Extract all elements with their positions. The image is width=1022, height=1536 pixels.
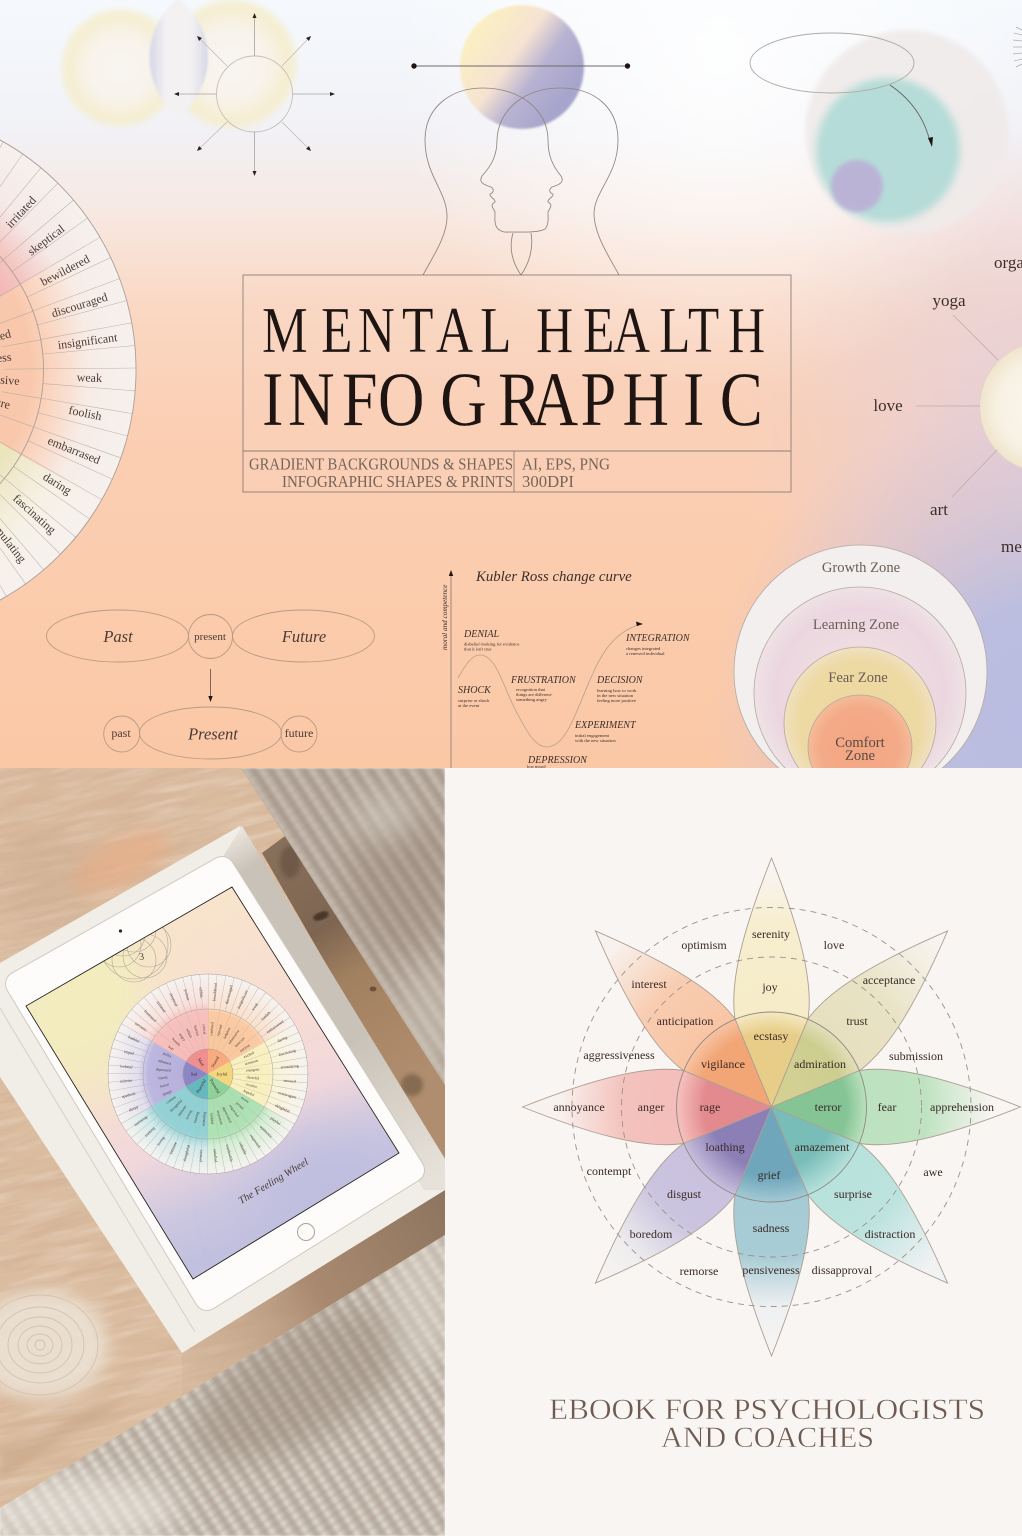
wheel outer ring labels: loving: [156, 1135, 166, 1147]
petal: fear: [772, 1069, 1020, 1145]
wheel outer ring labels: frustrated: [143, 1008, 158, 1023]
title box: [243, 275, 791, 492]
chart: Kubler Ross change curve: FRUSTRATION: [510, 675, 577, 686]
wheel middle ring labels: hateful: [193, 1025, 200, 1036]
wheel center labels: [191, 1055, 228, 1095]
title: line one: MENTAL HEALTH: [262, 293, 765, 366]
wheel middle ring labels: hostile: [171, 1037, 181, 1047]
emotion labels: grief: [758, 1168, 780, 1182]
chart: flower of emotions: [522, 858, 1020, 1356]
chart: past present future ellipses: future: [285, 726, 313, 740]
wheel center labels: Powerful: [209, 1078, 222, 1095]
wheel outer ring labels: playful: [269, 1115, 282, 1126]
chart: Kubler Ross change curve: at the event: [458, 703, 480, 708]
wheel outer ring labels: valuable: [238, 1141, 248, 1155]
emotion labels: submission: [889, 1049, 943, 1063]
wheel center labels: Joyful: [217, 1072, 228, 1076]
emotion labels: rage: [700, 1100, 720, 1114]
wheel outer ring labels: delightful: [274, 1103, 291, 1114]
chart: Kubler Ross change curve: [441, 569, 691, 769]
wheel middle ring labels: intimate: [177, 1104, 188, 1117]
chart: past present future ellipses: [46, 610, 374, 759]
emotion labels: [553, 927, 994, 1278]
wheel outer ring labels: worthwhile: [225, 1144, 235, 1163]
emotion labels: surprise: [834, 1187, 872, 1201]
chart: Kubler Ross change curve: SHOCK: [458, 685, 492, 696]
emotion labels: disgust: [667, 1187, 702, 1201]
emotion labels: acceptance: [863, 973, 915, 987]
wheel outer ring labels: amused: [283, 1078, 296, 1084]
icon: camera dot: [119, 929, 122, 933]
panel: right ebook background: [445, 768, 1022, 1536]
chart: partial feeling wheel left: weak: [76, 370, 102, 385]
wheel middle ring labels: submissive: [227, 1029, 240, 1045]
icon: gradient sphere behind heads: [460, 5, 584, 129]
panel: tablet on wooden table photo: [0, 768, 445, 1536]
emotion labels: dissapproval: [812, 1263, 873, 1277]
wheel middle ring labels: [156, 1022, 260, 1126]
wheel middle ring labels: nurturing: [201, 1112, 207, 1126]
chart: moon with radiating words: yoga: [932, 291, 966, 310]
emotion labels: admiration: [794, 1057, 846, 1071]
wheel middle ring labels: trusting: [193, 1111, 200, 1124]
chart: partial feeling wheel left: insignificant: [57, 330, 119, 352]
chart: moon with radiating words: [873, 253, 1022, 556]
tablet screen: [0, 887, 400, 1279]
wheel outer ring labels: satisfied: [213, 1149, 219, 1163]
wheel outer ring labels: thoughtful: [182, 1144, 191, 1162]
photo: wooden table: [0, 768, 445, 1508]
chart: Kubler Ross change curve: moral and competence: [441, 584, 449, 650]
chart: past present future ellipses: Present: [187, 724, 238, 744]
wheel outer ring labels: selfish: [198, 987, 204, 998]
emotion labels: vigilance: [701, 1057, 745, 1071]
panel: top gradient poster: [0, 0, 1022, 799]
wheel middle ring labels: guilty: [162, 1051, 172, 1059]
wheel middle ring labels: thoughtful: [169, 1099, 183, 1113]
petal: anticipation: [569, 904, 798, 1134]
chart: partial feeling wheel left: irritated: [3, 193, 39, 231]
icon: circle with radiating arrows: [174, 13, 335, 176]
wheel middle ring labels: loving: [185, 1109, 193, 1120]
wheel middle ring labels: creative: [245, 1082, 258, 1089]
chart: Kubler Ross change curve: a renewed individual: [626, 651, 665, 656]
wheel middle ring labels: angry: [178, 1032, 186, 1042]
subtitle left: INFOGRAPHIC SHAPES & PRINTS: [282, 472, 513, 491]
wheel middle ring labels: anxious: [239, 1043, 251, 1053]
chart: Kubler Ross change curve: that it isn't true: [464, 646, 492, 652]
emotion labels: distraction: [865, 1227, 915, 1241]
chart: Kubler Ross change curve: DECISION: [596, 675, 644, 686]
emotion labels: amazement: [795, 1140, 850, 1154]
wheel outer ring labels: fascinating: [278, 1048, 296, 1057]
chart: partial feeling wheel left: skeptical: [25, 221, 68, 258]
chart: past present future ellipses: Future: [281, 627, 326, 646]
chart: Kubler Ross change curve: DEPRESSION: [527, 755, 588, 766]
petal: disgust: [569, 1080, 798, 1310]
wheel middle ring labels: rejected: [216, 1024, 223, 1037]
photo: lower carpet: [0, 1235, 445, 1536]
chart: partial feeling wheel left: discouraged: [50, 290, 109, 320]
chart: Kubler Ross change curve: Kubler Ross change curve: [475, 569, 632, 585]
chart: Kubler Ross change curve: in the new situation: [597, 693, 634, 698]
chart: Kubler Ross change curve: changes integrated: [626, 646, 661, 651]
chart: past present future ellipses: present: [194, 631, 226, 643]
emotion labels: aggressiveness: [583, 1048, 655, 1062]
photo: white book: [0, 826, 445, 1353]
wheel middle ring labels: selfish: [185, 1028, 193, 1039]
emotion labels: boredom: [630, 1227, 673, 1241]
chart: Kubler Ross change curve: EXPERIMENT: [574, 720, 637, 731]
wheel outer ring labels: skeptical: [169, 992, 179, 1008]
heading: ebook for psychologists and coaches: EBOOK FOR PSYCHOLOGISTS: [549, 1393, 985, 1426]
wheel middle ring labels: helpless: [223, 1026, 232, 1040]
wheel middle ring labels: critical: [202, 1024, 207, 1035]
emotion labels: sadness: [753, 1221, 790, 1235]
wheel outer ring labels: nurturing: [133, 1114, 148, 1127]
chart: feeling wheel on tablet: [108, 974, 308, 1174]
emotion labels: anger: [638, 1100, 664, 1114]
wheel middle ring labels: proud: [235, 1101, 244, 1110]
chart: overlapping circles with lens: [60, 0, 298, 130]
petal: joy: [734, 858, 809, 1107]
heading: ebook for psychologists and coaches: AND COACHES: [661, 1421, 874, 1454]
wheel outer ring labels: daring: [276, 1034, 288, 1043]
title: line two: INFOGRAPHIC: [262, 358, 763, 442]
wheel middle ring labels: respected: [228, 1104, 240, 1118]
chart: partial feeling wheel left: daring: [41, 469, 74, 498]
emotion labels: fear: [878, 1100, 896, 1114]
chart: partial feeling wheel left: foolish: [67, 403, 103, 423]
wheel outer ring labels: sarcastic: [134, 1021, 148, 1033]
wheel outer ring labels: apathetic: [121, 1090, 136, 1099]
chart: nested spheres with orbit arrow: [750, 30, 1009, 234]
emotion labels: serenity: [752, 927, 790, 941]
emotion labels: remorse: [680, 1264, 718, 1278]
chart: Kubler Ross change curve: recognition that: [516, 687, 546, 692]
wheel outer ring labels: bashful: [127, 1034, 141, 1044]
wheel middle ring labels: cheerful: [246, 1075, 259, 1080]
icon: rosette page number: 3: [139, 952, 145, 963]
wheel outer ring labels: insignificant: [236, 989, 249, 1010]
petal: anger: [522, 1069, 772, 1145]
subtitle right: 300DPI: [522, 472, 574, 491]
emotion labels: interest: [631, 977, 667, 991]
wheel outer ring labels: optimistic: [259, 1124, 274, 1139]
wheel outer ring labels: inferior: [120, 1078, 133, 1084]
chart: Kubler Ross change curve: INTEGRATION: [625, 633, 691, 644]
wheel outer ring labels: irritated: [156, 1000, 167, 1013]
wheel outer ring labels: respected: [249, 1133, 262, 1149]
wheel outer ring labels: trusting: [144, 1126, 156, 1138]
emotion labels: trust: [846, 1014, 868, 1028]
chart: Kubler Ross change curve: things are different-: [516, 692, 553, 697]
emotion labels: loathing: [705, 1140, 745, 1154]
wheel middle ring labels: ashamed: [158, 1059, 172, 1066]
wheel middle ring labels: faithful: [209, 1113, 214, 1125]
photo: tablet device: [0, 869, 412, 1298]
wheel middle ring labels: confused: [209, 1022, 215, 1036]
chart: Kubler Ross change curve: DENIAL: [463, 629, 499, 640]
chart: Kubler Ross change curve: feeling more positive: [597, 698, 636, 703]
emotion labels: contempt: [587, 1164, 632, 1178]
emotion labels: terror: [815, 1100, 841, 1114]
icon: home button: [298, 1224, 314, 1240]
chart: past present future ellipses: past: [111, 726, 131, 740]
wheel middle ring labels: excited: [243, 1051, 255, 1059]
wheel middle ring labels: sleepy: [162, 1089, 173, 1097]
wheel middle ring labels: content: [165, 1094, 178, 1105]
wheel outer ring labels: discouraged: [224, 985, 234, 1005]
wheel middle ring labels: sensuous: [244, 1059, 259, 1066]
wheel center labels: Scared: [210, 1055, 221, 1068]
chart: comfort zone circles: [734, 544, 988, 768]
emotion labels: apprehension: [930, 1100, 994, 1114]
icon: sunburst ticks at right edge: [1013, 27, 1022, 67]
wheel middle ring labels: bored: [160, 1083, 169, 1089]
petal: surprise: [745, 1080, 974, 1310]
chart: partial feeling wheel left: bewildered: [38, 252, 92, 289]
subtitle right: AI, EPS, PNG: [522, 454, 610, 474]
wheel middle ring labels: hurt: [167, 1045, 176, 1052]
emotion labels: annoyance: [553, 1100, 605, 1114]
petal: trust: [745, 904, 974, 1134]
chart: Kubler Ross change curve: something angry: [516, 697, 547, 702]
chart: Kubler Ross change curve: with the new situation: [575, 738, 616, 743]
wheel outer ring labels: stupid: [124, 1049, 134, 1056]
wheel outer ring labels: [120, 983, 299, 1163]
wheel middle ring labels: energetic: [246, 1067, 260, 1073]
wheel middle ring labels: appreciated: [222, 1106, 233, 1124]
icon: rosette page number: [104, 927, 172, 982]
wheel middle ring labels: lonely: [158, 1076, 168, 1080]
subtitle right: [522, 458, 610, 487]
emotion labels: love: [824, 938, 844, 952]
wheel center labels: Sad: [191, 1072, 198, 1076]
chart: comfort zone circles: Fear Zone: [828, 670, 888, 686]
petal: sadness: [734, 1107, 809, 1356]
chart: Kubler Ross change curve: disbelief-looking for evidence: [464, 642, 519, 646]
subtitle left: [250, 458, 512, 487]
wheel outer ring labels: foolish: [260, 1010, 271, 1021]
chart: Kubler Ross change curve: surprise or shock: [458, 698, 490, 703]
wheel middle ring labels: hopeful: [243, 1089, 255, 1097]
emotion labels: anticipation: [657, 1014, 713, 1028]
chart: partial feeling wheel left: fascinating: [10, 491, 59, 537]
chart: comfort zone circles: Zone: [845, 748, 875, 764]
emotion labels: ecstasy: [754, 1029, 788, 1043]
chart: comfort zone circles: Growth Zone: [822, 560, 900, 576]
wheel outer ring labels: stimulating: [280, 1063, 299, 1070]
chart: comfort zone circles: Comfort: [835, 735, 885, 751]
chart: moon with radiating words: art: [930, 500, 948, 519]
wheel middle ring labels: depressed: [156, 1067, 171, 1073]
wheel outer ring labels: sleepy: [128, 1104, 139, 1113]
wheel outer ring labels: pensive: [197, 1149, 203, 1162]
wheel outer ring labels: jealous: [183, 988, 191, 1001]
tablet caption: The Feeling Wheel: [237, 1157, 311, 1207]
chart: Kubler Ross change curve: learning how to work: [597, 688, 637, 693]
icon: horizontal line with end dots: [411, 63, 630, 69]
wheel outer ring labels: weak: [250, 1002, 259, 1011]
heading: ebook for psychologists and coaches: [549, 1393, 985, 1454]
wheel center labels: Peaceful: [195, 1078, 207, 1094]
wheel outer ring labels: isolated: [120, 1063, 133, 1069]
chart: Kubler Ross change curve: low mood: [527, 764, 546, 769]
emotion labels: optimism: [681, 938, 727, 952]
chart: partial feeling wheel left: embarrased: [46, 433, 102, 467]
wheel outer ring labels: intimate: [168, 1141, 178, 1155]
wheel center labels: Mad: [197, 1057, 206, 1067]
wheel middle ring labels: important: [216, 1110, 224, 1126]
chart: moon with radiating words: love: [873, 396, 903, 415]
chart: comfort zone circles: Learning Zone: [813, 617, 899, 633]
chart: past present future ellipses: Past: [102, 627, 133, 646]
icon: two facing head outlines: [423, 88, 619, 275]
chart: partial feeling wheel left: [0, 140, 136, 600]
wheel outer ring labels: extravagant: [278, 1090, 298, 1100]
emotion labels: joy: [761, 980, 778, 994]
emotion labels: pensiveness: [742, 1263, 800, 1277]
wheel outer ring labels: bewildered: [211, 983, 218, 1001]
wheel middle ring labels: aware: [240, 1096, 250, 1104]
emotion labels: awe: [923, 1165, 943, 1179]
wheel outer ring labels: embarrassed: [265, 1019, 285, 1034]
subtitle left: GRADIENT BACKGROUNDS & SHAPES: [249, 454, 513, 474]
wheel middle ring labels: insecure: [234, 1036, 246, 1048]
photo: upper carpet: [241, 768, 445, 1084]
chart: Kubler Ross change curve: initial engagement: [575, 733, 610, 738]
